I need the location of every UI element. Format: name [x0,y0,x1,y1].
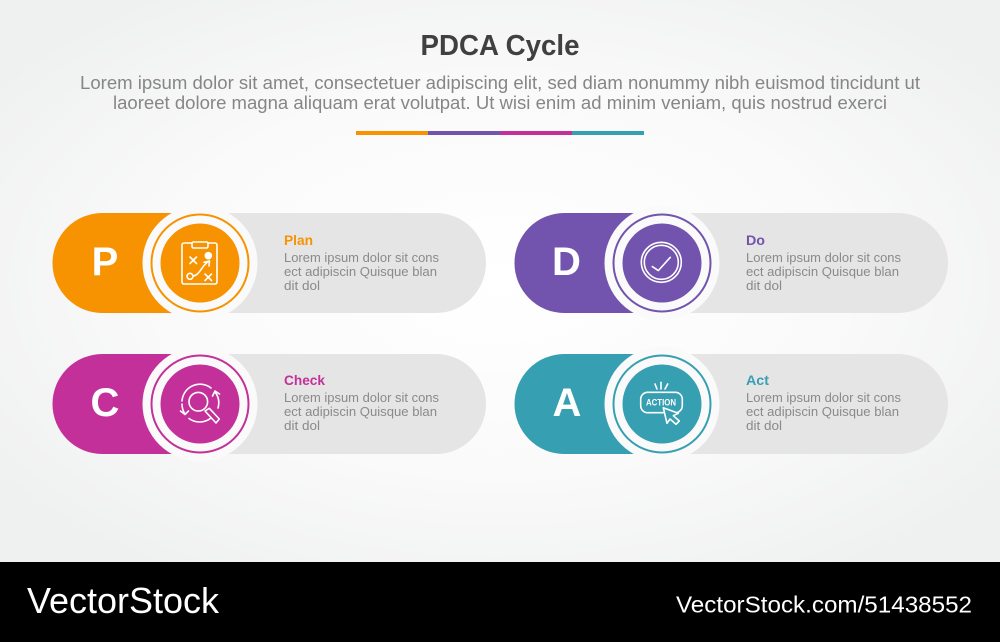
do text: Lorem ipsum dolor sit cons [746,251,901,265]
icon: clipboard strategy [182,242,217,284]
icon badge [604,206,720,320]
letter D: D [552,240,581,284]
panel: check [52,346,486,462]
act text [746,373,901,433]
letter tab [514,354,662,454]
letter C: C [91,381,119,425]
act text: Lorem ipsum dolor sit cons [746,391,901,405]
subtitle text: laoreet dolore magna aliquam erat volutpat. Ut wisi enim ad minim veniam, quis nostrud exerci [113,92,887,113]
act text: dit dol [746,419,782,433]
icon: check mark [641,242,681,282]
check text: ect adipiscin Quisque blan [284,405,437,419]
letter A: A [553,381,581,425]
pill background [514,354,948,454]
plan text [284,233,439,293]
plan text: Plan [284,233,313,248]
subtitle text: Lorem ipsum dolor sit amet, consectetuer adipiscing elit, sed diam nonummy nibh euismod tincidunt ut [80,72,920,93]
icon badge [142,206,258,320]
footer image id: VectorStock.com/51438552 [676,592,972,618]
icon badge [604,346,720,462]
do text: Do [746,233,765,248]
act text: ect adipiscin Quisque blan [746,405,899,419]
do text: dit dol [746,279,782,293]
icon: magnifier with cycle arrows [180,384,220,423]
panel: plan [52,206,486,320]
icon badge [142,346,258,462]
plan text: ect adipiscin Quisque blan [284,265,437,279]
letter P: P [92,240,118,284]
title: PDCA Cycle [420,30,580,62]
pill background [52,354,486,454]
subtitle text [80,72,920,113]
check text: Lorem ipsum dolor sit cons [284,391,439,405]
plan text: Lorem ipsum dolor sit cons [284,251,439,265]
check text [284,373,439,433]
check text: dit dol [284,419,320,433]
letter tab [52,354,200,454]
plan text: dit dol [284,279,320,293]
panel: act [514,346,948,462]
icon: action button with cursor: ACTION [646,398,676,408]
pill background [52,213,486,313]
act text: Act [746,373,770,388]
letter tab [52,213,200,313]
icon: action button with cursor [641,382,682,424]
do text: ect adipiscin Quisque blan [746,265,899,279]
color legend bar [356,131,644,135]
panel: do [514,206,948,320]
letter tab [514,213,662,313]
pill background [514,213,948,313]
do text [746,233,901,293]
footer logo text: VectorStock [27,580,220,621]
check text: Check [284,373,325,388]
footer bar [0,562,1000,642]
